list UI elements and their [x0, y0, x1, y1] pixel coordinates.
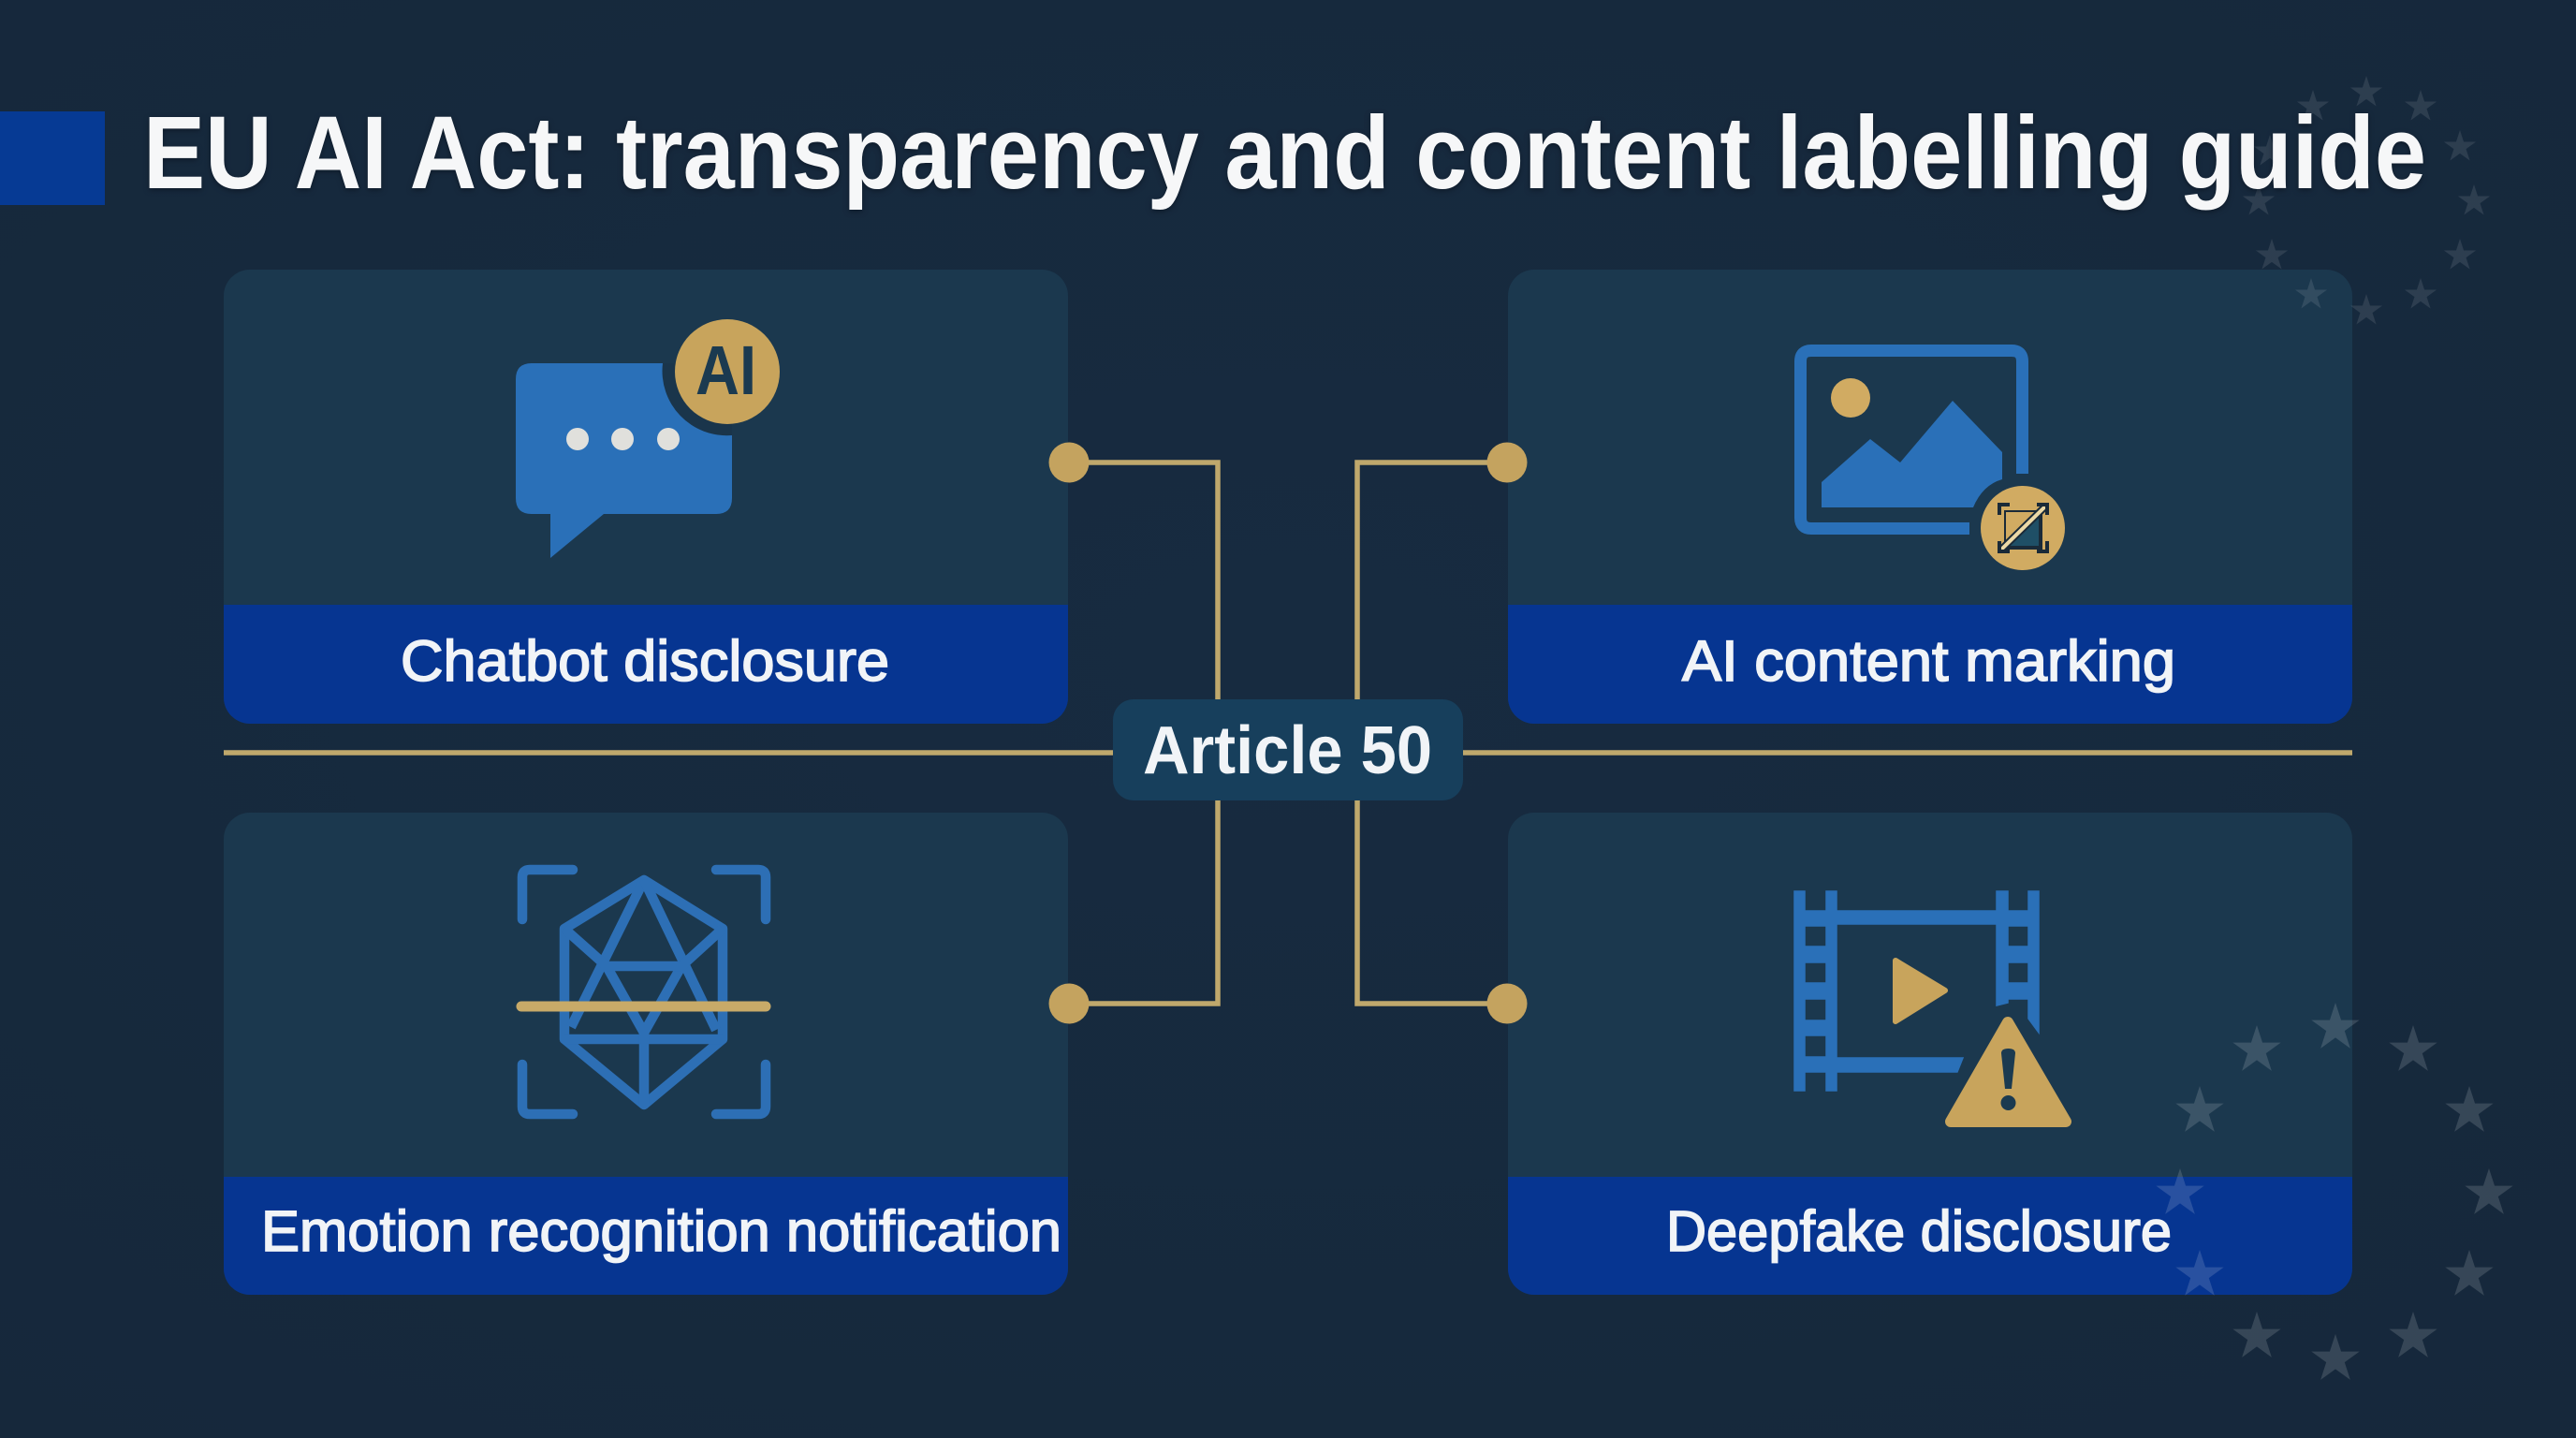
- label: AI content marking: AI content marking: [1682, 629, 2175, 693]
- icon: face mesh scan: [521, 870, 766, 1114]
- connectors: gold lines joining cards to Article 50: [224, 462, 2352, 1004]
- label: deepfake disclosure: Deepfake disclosure: [1666, 1199, 2172, 1263]
- label: chatbot disclosure: Chatbot disclosure: [401, 629, 889, 693]
- panel: deepfake disclosure: [1508, 813, 2352, 1295]
- EU star ring, top right: [2243, 76, 2490, 325]
- label: emotion recognition notification: Emotion recognition notification: [261, 1199, 1061, 1263]
- icon: image frame with marking badge: [1801, 350, 2065, 570]
- icon: film strip with warning triangle: [1794, 891, 2066, 1122]
- central hub: Article 50: [1113, 699, 1463, 800]
- panel: AI content marking: [1508, 270, 2352, 724]
- panel: emotion recognition notification: [224, 813, 1068, 1295]
- panel: chatbot disclosure: [224, 270, 1068, 724]
- icon: chat bubble with AI badge: [516, 319, 780, 558]
- connector end dots: [1048, 442, 1528, 1024]
- title accent block: [0, 111, 105, 205]
- EU star ring, bottom right: [2156, 1003, 2513, 1380]
- icon: chat bubble with AI badge: AI: [695, 331, 756, 409]
- central hub: Article 50: Article 50: [1143, 713, 1432, 788]
